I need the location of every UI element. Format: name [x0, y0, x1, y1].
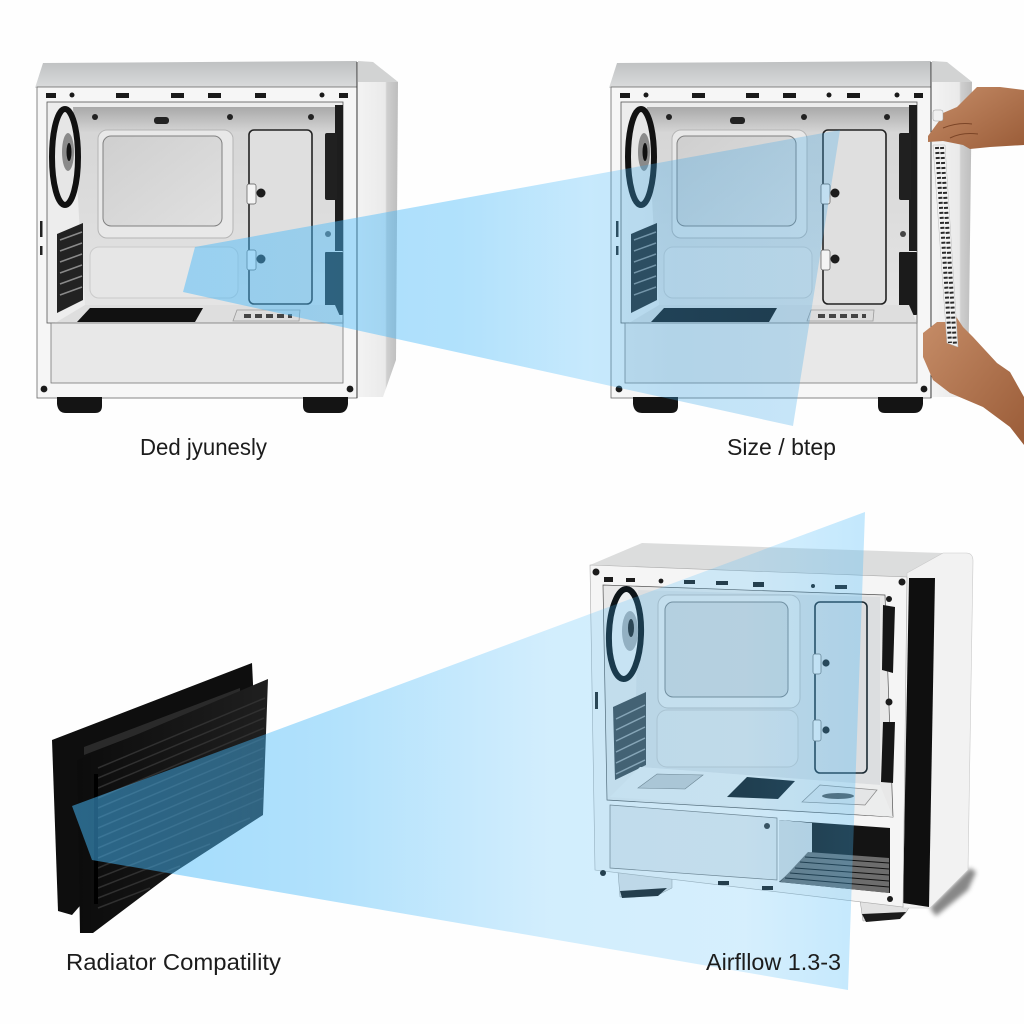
- side panel: [903, 553, 973, 908]
- floor: [55, 305, 343, 323]
- floor opening: [77, 308, 203, 322]
- grommet clips: [247, 184, 256, 270]
- interior: [47, 102, 343, 323]
- rear wall: [636, 590, 880, 785]
- top panel: [35, 61, 357, 88]
- upper panel: [98, 130, 233, 238]
- lower hand: [923, 315, 1024, 445]
- side slot: [94, 774, 98, 904]
- lower panel: [657, 710, 798, 767]
- top panel: [609, 61, 931, 88]
- PSU shroud: [51, 323, 343, 383]
- floor vent: [233, 310, 300, 321]
- case frame: [37, 87, 357, 398]
- shroud screw: [764, 823, 770, 829]
- case frame: [611, 87, 931, 398]
- foot right base: [862, 912, 906, 922]
- opening left wall: [779, 820, 812, 882]
- feet: [57, 397, 348, 413]
- panel: radiator: [52, 663, 268, 933]
- rear wall: [647, 107, 909, 305]
- corner screws: [616, 386, 927, 392]
- grommet clips: [813, 654, 821, 741]
- airflow beam, upper: [183, 130, 840, 426]
- mesh lines: [785, 857, 889, 887]
- side panel: [932, 61, 972, 397]
- top panel: [590, 543, 943, 577]
- foot left base: [620, 888, 667, 898]
- grommets: [256, 188, 266, 264]
- floor: [629, 305, 917, 323]
- panel: case with tape measure, top right: [609, 61, 972, 413]
- side chamfer: [932, 61, 972, 82]
- mesh floor: [780, 852, 889, 893]
- panel: hands with tape measure: [923, 87, 1024, 445]
- top row holes: [620, 92, 923, 98]
- motherboard window: [665, 602, 788, 697]
- floor opening dark: [727, 777, 795, 799]
- corner screws: [41, 386, 353, 392]
- vent pattern: [244, 314, 292, 318]
- airflow beam, lower: [72, 512, 865, 990]
- foot left: [618, 872, 672, 897]
- rear wall: [73, 107, 335, 305]
- front plate: [77, 679, 268, 933]
- left port: [595, 692, 598, 709]
- left ports: [616, 221, 618, 255]
- feet: [633, 397, 923, 413]
- side chamfer: [358, 61, 398, 82]
- label: top left: Ded jyunesly: [140, 434, 267, 460]
- panel: angled case view, bottom right: [590, 543, 976, 922]
- back plate recess: [84, 688, 240, 755]
- top row holes: [46, 92, 348, 98]
- cable cutout: [249, 130, 312, 304]
- tape markings: [937, 147, 955, 345]
- vent pattern: [818, 314, 866, 318]
- floor opening light: [638, 774, 703, 789]
- interior: [603, 585, 893, 817]
- motherboard window: [103, 136, 222, 226]
- lower right slot: [325, 252, 343, 315]
- corner shadow: [930, 868, 976, 916]
- upper hand: [928, 87, 1024, 149]
- motherboard window: [677, 136, 796, 226]
- rear wall holes: [666, 114, 906, 237]
- PSU shroud: [610, 805, 777, 880]
- upper panel: [658, 595, 800, 708]
- cable cutout: [815, 602, 867, 773]
- rear wall holes: [92, 114, 331, 237]
- PSU shroud: [625, 323, 917, 383]
- frame holes: [592, 568, 906, 902]
- back plate: [52, 663, 254, 915]
- upper right slot: [899, 133, 911, 200]
- tape clip: [933, 110, 943, 121]
- finger creases: [943, 124, 978, 138]
- grommet clips: [821, 184, 830, 270]
- left ports: [40, 221, 42, 255]
- right rail: [909, 105, 917, 251]
- right upper slot: [882, 605, 895, 673]
- fan: [607, 588, 643, 680]
- floor: [610, 767, 893, 817]
- fin lines: [98, 698, 265, 908]
- interior: [621, 102, 917, 323]
- front edge line: [930, 62, 932, 398]
- PSU opening: [779, 820, 890, 893]
- label: bottom right: Airfllow 1.3-3: [706, 949, 841, 975]
- grommets: [822, 659, 830, 734]
- side panel: [358, 61, 398, 397]
- foot right: [860, 900, 910, 921]
- front edge line: [356, 62, 358, 398]
- lower panel: [664, 247, 812, 298]
- side black vent: [903, 578, 935, 907]
- tape measure: [933, 145, 958, 347]
- right lower slot: [881, 722, 895, 783]
- front frame: [590, 565, 907, 907]
- cable cutout: [823, 130, 886, 304]
- floor vent: [807, 310, 874, 321]
- floor opening: [651, 308, 777, 322]
- panel: case front view, top left: [35, 61, 398, 413]
- expansion slots: [631, 223, 657, 313]
- upper panel: [672, 130, 807, 238]
- lower right slot: [899, 252, 917, 315]
- lower panel: [90, 247, 238, 298]
- fan: [628, 109, 654, 205]
- floor vent: [802, 785, 877, 805]
- expansion slots: [57, 223, 83, 313]
- fan: [52, 109, 78, 205]
- vent pattern: [822, 793, 854, 799]
- grommets: [830, 188, 840, 264]
- expansion slots: [613, 692, 646, 780]
- label: top right: Size / btep: [727, 434, 836, 460]
- right rail: [335, 105, 343, 251]
- label: bottom left: Radiator Compatility: [66, 949, 282, 975]
- upper right slot: [325, 133, 337, 200]
